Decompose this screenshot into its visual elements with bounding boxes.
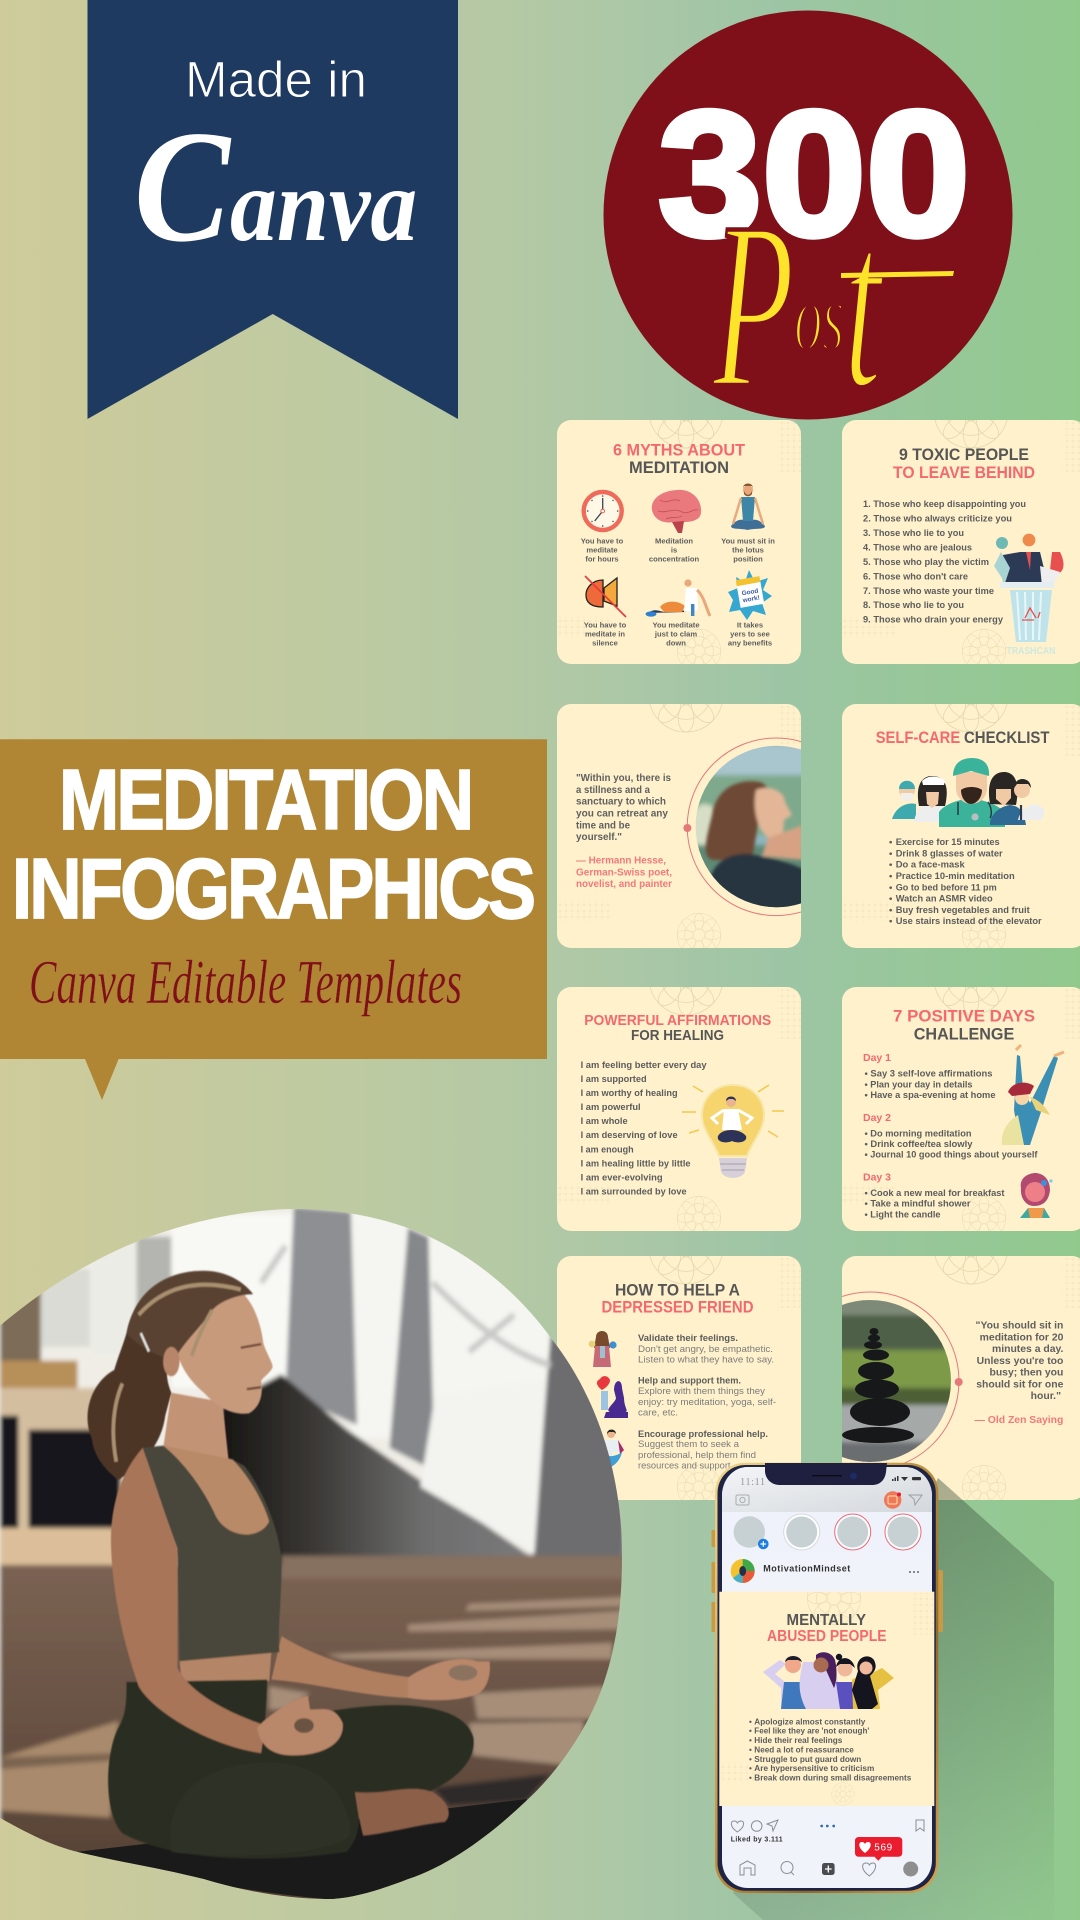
label: just to clam <box>654 629 697 638</box>
day 2: • Journal 10 good things about yourself <box>864 1150 1038 1161</box>
list: Watch an ASMR video <box>896 894 993 905</box>
quote: yourself." <box>576 832 622 843</box>
list: 3. Those who lie to you <box>863 528 964 539</box>
label: You meditate <box>652 620 700 630</box>
icon: meditating man <box>731 484 765 530</box>
quote <box>976 1320 1064 1402</box>
day 2: • Do morning meditation <box>864 1128 972 1139</box>
text block 2: Help and support them. <box>638 1376 741 1386</box>
label: You must sit in <box>721 537 775 546</box>
heading: ABUSED PEOPLE <box>767 1628 887 1645</box>
list: • <box>889 871 893 882</box>
side buttons <box>712 1530 943 1632</box>
attribution: — Hermann Hesse, <box>576 856 666 867</box>
day 3: • Cook a new meal for breakfast <box>864 1188 1005 1199</box>
label <box>728 620 772 647</box>
list: Feel like they are 'not enough' <box>754 1727 869 1736</box>
list: I am healing little by little <box>581 1158 691 1169</box>
post header: MotivationMindset <box>763 1564 850 1574</box>
list: • <box>889 916 893 927</box>
phone screen <box>720 1466 935 1890</box>
text block 2: enjoy: try meditation, yoga, self- <box>638 1397 776 1407</box>
heading: 7 POSITIVE DAYS <box>893 1007 1035 1026</box>
heading: CHALLENGE <box>914 1025 1014 1044</box>
list: I am ever-evolving <box>581 1172 663 1183</box>
list: • <box>889 905 893 916</box>
quote: busy; then you <box>989 1368 1063 1379</box>
icon: helping kneeling <box>597 1376 628 1418</box>
heading line 1: MEDITATION <box>59 752 471 847</box>
heading: 9 TOXIC PEOPLE <box>899 445 1029 464</box>
heading: TO LEAVE BEHIND <box>893 463 1035 482</box>
day 1: • Have a spa-evening at home <box>864 1090 996 1101</box>
like badge <box>855 1837 902 1861</box>
label <box>652 620 700 647</box>
attribution: — Old Zen Saying <box>974 1415 1063 1426</box>
attribution: German-Swiss poet, <box>576 867 672 878</box>
attribution: novelist, and painter <box>576 879 672 890</box>
quote: "You should sit in <box>976 1320 1063 1332</box>
text block 1: Don't get angry, be empathetic. <box>638 1344 773 1354</box>
label <box>581 537 624 563</box>
list: • <box>889 882 893 893</box>
list: Break down during small disagreements <box>754 1774 912 1782</box>
caption: trashcan: TRASHCAN <box>1006 645 1056 657</box>
list: 9. Those who drain your energy <box>863 615 1004 626</box>
heading: MENTALLY <box>787 1612 867 1629</box>
icon: good work note <box>728 570 772 620</box>
quote <box>576 773 671 843</box>
quote: Unless you're too <box>977 1356 1063 1367</box>
list: Use stairs instead of the elevator <box>896 916 1042 927</box>
list: I am feeling better every day <box>581 1060 707 1071</box>
heading: CHECKLIST <box>964 729 1050 747</box>
heading <box>613 440 746 477</box>
day 3: • Take a mindful shower <box>864 1199 971 1210</box>
day 3 <box>863 1171 1005 1220</box>
list: Practice 10-min meditation <box>896 871 1015 882</box>
panel: powerful affirmations <box>557 941 801 1240</box>
icon: good work note: work! <box>741 594 760 604</box>
label: any benefits <box>728 638 772 647</box>
icon: clock <box>584 492 622 530</box>
heading: 6 MYTHS ABOUT <box>613 440 746 460</box>
list: I am surrounded by love <box>581 1186 687 1198</box>
phone mockup <box>712 1463 943 1893</box>
attribution <box>576 856 672 890</box>
list: I am supported <box>581 1074 647 1085</box>
subtitle script: Canva Editable Templates <box>29 949 462 1017</box>
heading <box>893 445 1035 482</box>
text block 3: professional, help them find <box>638 1450 756 1460</box>
icon: woman raising arms <box>1002 1045 1064 1145</box>
text block 2 <box>638 1376 776 1418</box>
list: • <box>889 860 893 871</box>
heading <box>767 1612 887 1645</box>
icon: brain <box>652 490 701 533</box>
list: • <box>749 1727 752 1736</box>
day 1 <box>863 1052 996 1101</box>
day 2 <box>863 1112 1038 1161</box>
list: I am whole <box>581 1116 628 1127</box>
script: Post: os <box>794 261 844 372</box>
app header: 11:11 <box>740 1477 766 1488</box>
list: • <box>749 1717 752 1726</box>
label: down <box>666 638 686 647</box>
text block 3 <box>638 1429 768 1471</box>
heading: HOW TO HELP A <box>615 1280 740 1299</box>
list: Drink 8 glasses of water <box>896 848 1003 859</box>
text block 3: Suggest them to seek a <box>638 1439 740 1449</box>
photo: woman meditating <box>0 1195 653 1920</box>
bottom navigation <box>740 1861 918 1876</box>
banner: meditation infographics <box>0 739 547 1100</box>
heading: MEDITATION <box>629 458 729 477</box>
list: • <box>749 1745 752 1754</box>
list: 2. Those who always criticize you <box>863 514 1012 524</box>
text block 1 <box>638 1333 774 1365</box>
list: 4. Those who are jealous <box>863 542 972 553</box>
label <box>721 537 775 563</box>
label: Meditation <box>655 537 693 546</box>
label <box>584 620 627 647</box>
icon: people in trash can <box>994 534 1064 642</box>
label: silence <box>592 638 618 647</box>
list: 5. Those who play the victim <box>863 557 989 568</box>
panel: self-care checklist <box>842 658 1080 957</box>
day 1: • Say 3 self-love affirmations <box>864 1069 992 1080</box>
list: Need a lot of reassurance <box>754 1745 854 1754</box>
icon: medical team <box>892 758 1045 827</box>
icon: professional help <box>600 1430 624 1468</box>
label: yers to see <box>730 629 770 638</box>
list: 6. Those who don't care <box>863 571 968 582</box>
quote: time and be <box>576 820 630 831</box>
heading: SELF-CARE <box>876 729 960 747</box>
label: concentration <box>649 554 699 563</box>
quote: minutes a day. <box>992 1344 1064 1355</box>
label: meditate <box>586 546 618 554</box>
text block 1: Validate their feelings. <box>638 1333 738 1343</box>
quote: should sit for one <box>976 1379 1064 1390</box>
app header <box>720 1466 935 1512</box>
list: • <box>889 837 893 848</box>
list: • <box>749 1736 752 1745</box>
text block 1: Listen to what they have to say. <box>638 1355 774 1365</box>
icon: good work note: Good <box>741 588 759 597</box>
icon: four people <box>763 1652 894 1709</box>
heading: POWERFUL AFFIRMATIONS <box>584 1012 771 1029</box>
icon: woman thinking <box>589 1331 617 1367</box>
panel: Hermann Hesse quote <box>557 704 801 948</box>
list: Buy fresh vegetables and fruit <box>896 905 1030 916</box>
day 1: • Plan your day in details <box>864 1079 972 1090</box>
list: 7. Those who waste your time <box>863 586 994 597</box>
quote: "Within you, there is <box>576 773 671 784</box>
panel: 6 myths about meditation <box>557 374 801 673</box>
ring <box>683 738 801 916</box>
post card: mentally abused people <box>719 1571 934 1806</box>
list <box>749 1717 912 1782</box>
photo: stone stack <box>842 1300 951 1462</box>
day 2: Day 2 <box>863 1112 891 1124</box>
icon: muted speaker <box>585 576 626 617</box>
script: Post <box>712 173 954 437</box>
badge: 300 Post <box>604 10 1012 437</box>
heading: Made in: Made in <box>185 51 367 108</box>
panel: how to help a depressed friend <box>557 1210 801 1509</box>
list <box>863 499 1026 626</box>
list: I am deserving of love <box>581 1130 678 1141</box>
script: Canva: Canva <box>134 97 417 275</box>
text block 3: resources and support <box>638 1461 731 1471</box>
list: Apologize almost constantly <box>754 1717 866 1726</box>
quote: sanctuary to which <box>576 797 666 808</box>
script: Post: P <box>712 173 794 437</box>
post actions <box>731 1820 924 1844</box>
list: Go to bed before 11 pm <box>896 882 997 893</box>
text block 3: Encourage professional help. <box>638 1429 768 1439</box>
quote: meditation for 20 <box>980 1332 1064 1343</box>
list: • <box>749 1755 752 1764</box>
list <box>581 1060 707 1198</box>
text block 2: Explore with them things they <box>638 1386 765 1396</box>
quote: a stillness and a <box>576 785 650 796</box>
list: Exercise for 15 minutes <box>896 837 1000 848</box>
heading <box>876 729 1050 747</box>
list <box>889 837 1042 927</box>
ribbon: Made in Canva <box>88 0 458 419</box>
ring <box>842 1292 963 1463</box>
label: is <box>671 546 677 554</box>
icon: lightbulb meditator <box>682 1085 784 1178</box>
stories row <box>734 1514 922 1550</box>
list: Do a face-mask <box>896 860 965 871</box>
label <box>649 537 699 563</box>
heading: FOR HEALING <box>631 1027 724 1044</box>
panel: 7 positive days challenge <box>842 941 1080 1240</box>
list: I am worthy of healing <box>581 1088 678 1099</box>
script: Post: t <box>844 173 884 437</box>
day 3: Day 3 <box>863 1171 891 1183</box>
phone shadow <box>733 1478 1054 1920</box>
list: Struggle to put guard down <box>754 1755 861 1764</box>
panel: old zen saying <box>842 1256 1080 1500</box>
heading <box>584 1012 771 1044</box>
panel: 9 toxic people <box>842 374 1080 673</box>
quote: hour." <box>1031 1391 1061 1402</box>
post actions: Liked by 3.111 <box>731 1837 783 1844</box>
icon: reclining man <box>646 579 710 617</box>
list: • <box>889 848 893 859</box>
list: 1. Those who keep disappointing you <box>863 499 1026 510</box>
list: • <box>749 1774 752 1782</box>
label: the lotus <box>732 546 764 554</box>
label: position <box>733 554 763 563</box>
list: Hide their real feelings <box>754 1736 843 1745</box>
label: It takes <box>737 620 763 630</box>
heading line 2: INFOGRAPHICS <box>12 841 534 936</box>
day 2: • Drink coffee/tea slowly <box>864 1139 973 1150</box>
like badge: 569 <box>874 1842 893 1854</box>
quote: you can retreat any <box>576 809 668 820</box>
heading: DEPRESSED FRIEND <box>602 1298 754 1317</box>
photo: woman relaxing <box>696 746 801 908</box>
text block 2: care, etc. <box>638 1408 678 1418</box>
number: 300: 300 <box>658 74 970 273</box>
day 3: • Light the candle <box>864 1209 940 1220</box>
list: I am enough <box>581 1144 634 1155</box>
label: for hours <box>585 554 619 563</box>
day 1: Day 1 <box>863 1052 891 1064</box>
post header <box>730 1559 919 1583</box>
heading <box>602 1280 754 1317</box>
list: • <box>749 1764 752 1773</box>
phone body <box>715 1463 938 1893</box>
label: You have to <box>581 537 624 546</box>
label: You have to <box>584 620 627 630</box>
icon: smiling girl <box>1020 1173 1053 1218</box>
list: 8. Those who lie to you <box>863 600 964 611</box>
list: • <box>889 894 893 905</box>
list: I am powerful <box>581 1102 641 1113</box>
label: meditate in <box>585 629 625 638</box>
heading <box>893 1007 1035 1044</box>
notch <box>765 1463 921 1485</box>
list: Are hypersensitive to criticism <box>754 1764 874 1773</box>
